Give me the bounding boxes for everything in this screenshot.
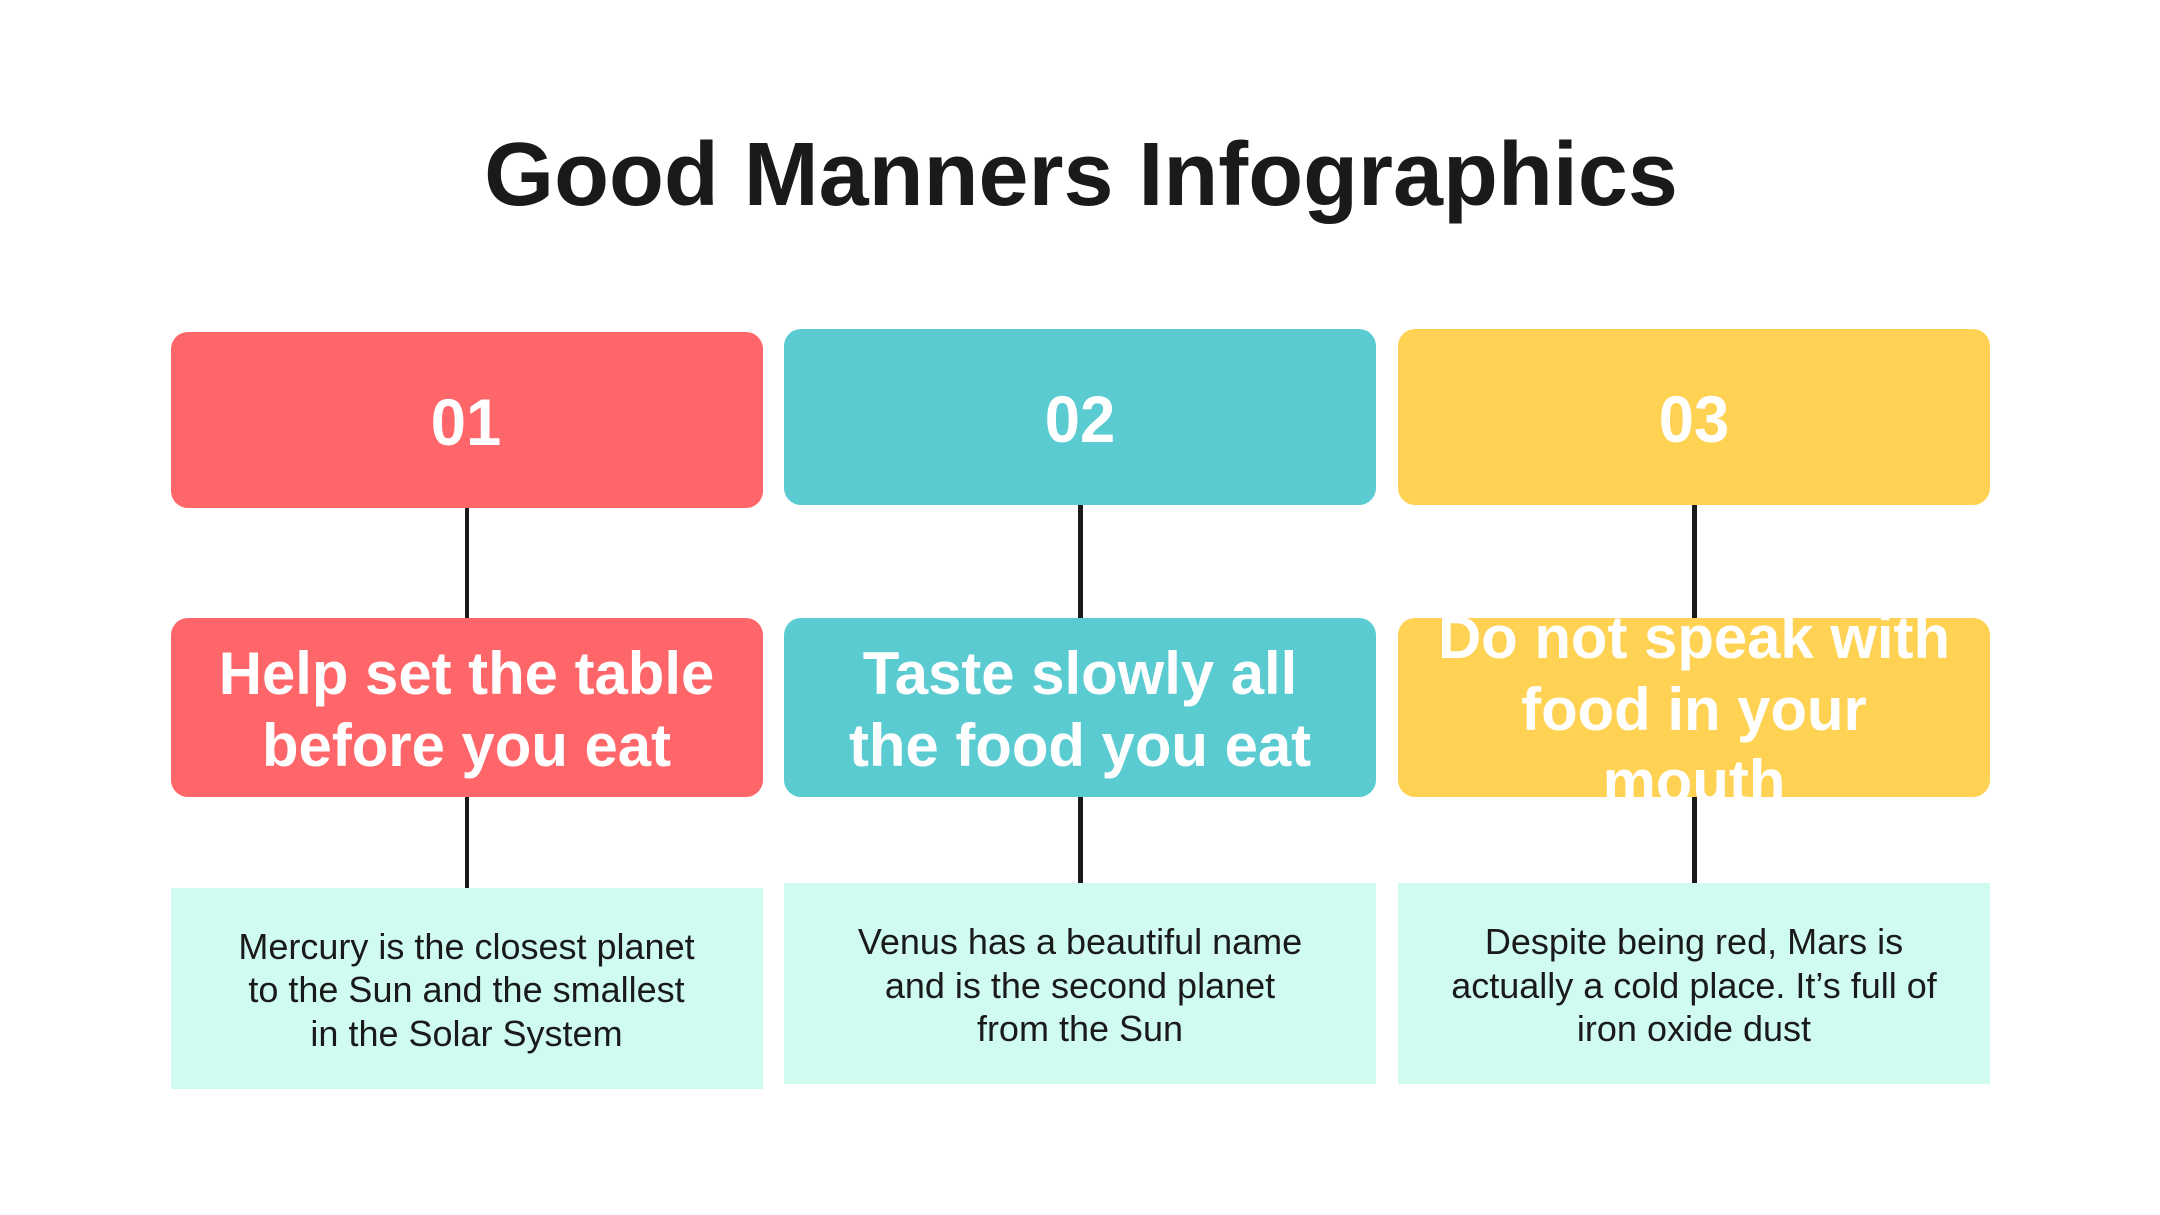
connector: heading to description bbox=[464, 792, 469, 892]
number 01: 01 bbox=[430, 385, 501, 459]
heading box 03 bbox=[1398, 618, 1990, 797]
description 02: from the Sun bbox=[977, 1008, 1183, 1049]
description 03: iron oxide dust bbox=[1577, 1008, 1811, 1049]
description 01 bbox=[238, 926, 695, 1054]
heading 01: before you eat bbox=[262, 712, 671, 779]
panel: column 03 bbox=[1398, 329, 1990, 1084]
heading 02 bbox=[849, 640, 1311, 779]
heading 03 bbox=[1438, 604, 1950, 815]
number box 02 bbox=[784, 329, 1376, 505]
description 01: in the Solar System bbox=[310, 1013, 623, 1054]
number box 01 bbox=[170, 332, 762, 508]
description 01: to the Sun and the smallest bbox=[248, 969, 685, 1010]
heading box 01 bbox=[170, 618, 762, 797]
description 03 bbox=[1451, 921, 1937, 1049]
heading 01: Help set the table bbox=[219, 640, 714, 707]
description box 02 bbox=[784, 883, 1376, 1084]
number box 03 bbox=[1398, 329, 1990, 505]
description 02: and is the second planet bbox=[885, 965, 1275, 1006]
number 03: 03 bbox=[1659, 382, 1729, 456]
description 02 bbox=[858, 921, 1302, 1049]
panel: column 01 bbox=[171, 332, 763, 1089]
panel: column 02 bbox=[784, 329, 1376, 1084]
heading 03: food in your bbox=[1521, 676, 1867, 743]
connector: number to heading bbox=[1692, 499, 1697, 619]
heading 03: Do not speak with bbox=[1438, 604, 1950, 671]
connector: number to heading bbox=[464, 502, 469, 622]
heading 01 bbox=[219, 640, 714, 779]
description 01: Mercury is the closest planet bbox=[238, 926, 695, 967]
heading 02: Taste slowly all bbox=[863, 640, 1297, 707]
heading box 02 bbox=[784, 618, 1376, 797]
connector: heading to description bbox=[1078, 789, 1083, 889]
number 02: 02 bbox=[1045, 382, 1115, 456]
heading 03: mouth bbox=[1603, 748, 1785, 815]
connector: heading to description bbox=[1692, 789, 1697, 889]
description 02: Venus has a beautiful name bbox=[858, 921, 1302, 962]
description box 01 bbox=[170, 888, 762, 1089]
description box 03 bbox=[1398, 883, 1990, 1084]
title: Good Manners Infographics bbox=[484, 125, 1678, 225]
heading 02: the food you eat bbox=[849, 712, 1311, 779]
description 03: actually a cold place. It’s full of bbox=[1451, 965, 1937, 1006]
description 03: Despite being red, Mars is bbox=[1485, 921, 1903, 962]
connector: number to heading bbox=[1078, 499, 1083, 619]
